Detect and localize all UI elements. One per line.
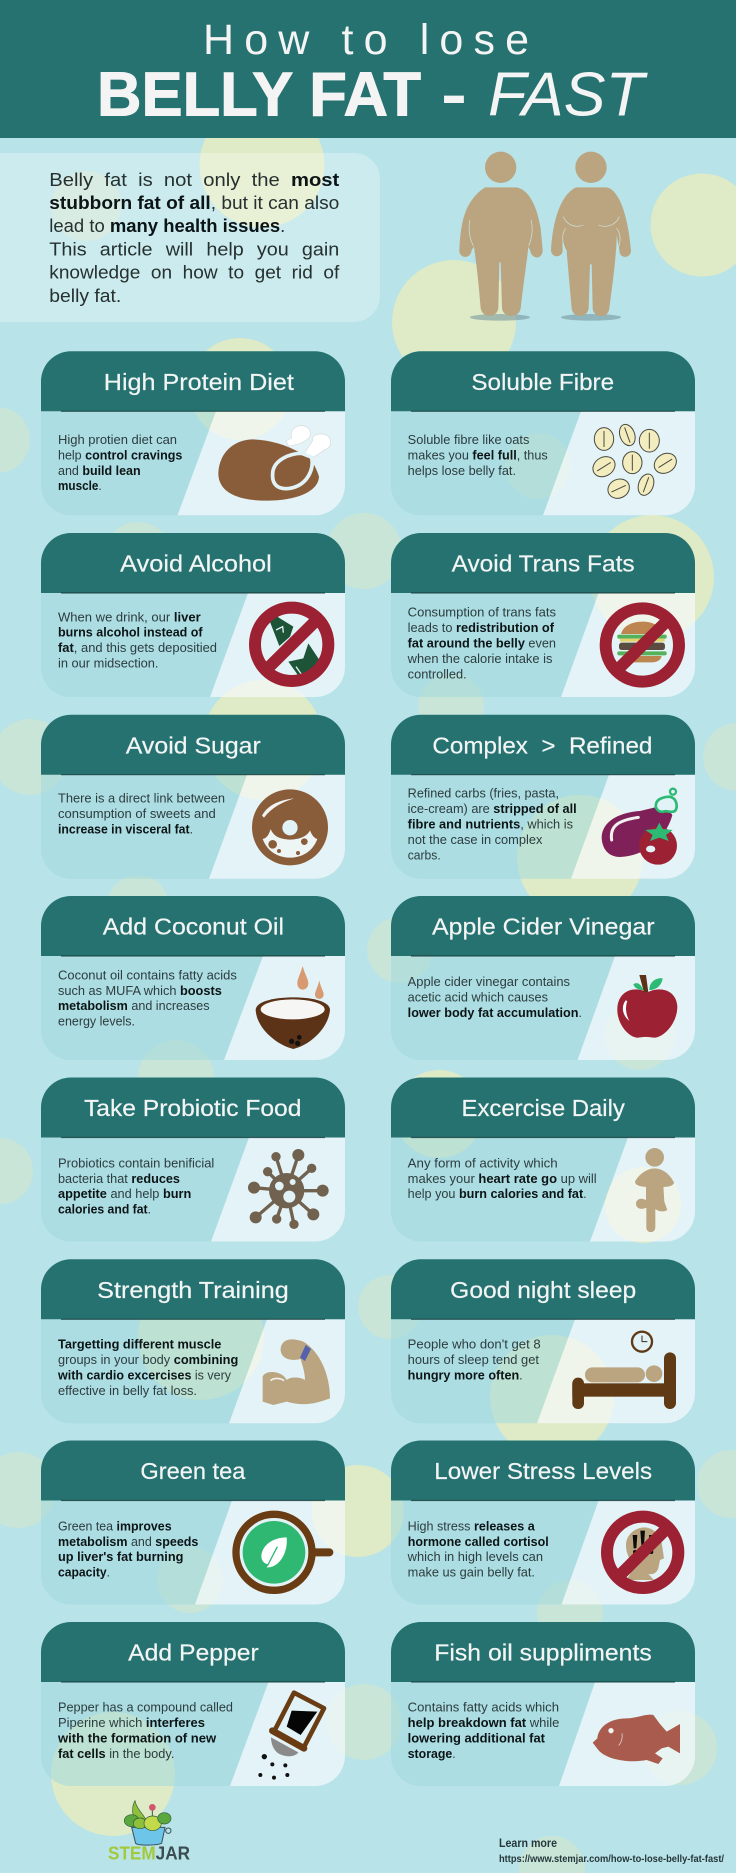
body text	[408, 787, 577, 862]
body text: Any form of activity which	[408, 1156, 558, 1170]
body text: People who don't get 8	[408, 1338, 541, 1352]
icon: fish	[593, 1715, 680, 1764]
card: Take Probiotic Food	[41, 1078, 345, 1242]
icon: apple	[617, 975, 677, 1038]
body text: Green tea improves	[58, 1519, 172, 1533]
logo wordmark: STEMJAR	[108, 1844, 190, 1864]
icon: cup of green tea	[236, 1514, 329, 1590]
body text: hormone called cortisol	[408, 1535, 549, 1549]
heading: Lower Stress Levels	[434, 1458, 652, 1484]
body text: Coconut oil contains fatty acids	[58, 968, 237, 982]
card: Apple Cider Vinegar	[391, 896, 695, 1060]
title: BELLY FAT: BELLY FAT	[97, 60, 421, 130]
card: Add Coconut Oil	[41, 896, 345, 1060]
body text: effective in belly fat loss.	[58, 1384, 197, 1398]
body text: storage.	[408, 1747, 456, 1761]
body text	[407, 1519, 549, 1580]
body text: Contains fatty acids which	[408, 1701, 559, 1715]
body text: lowering additional fat	[408, 1732, 546, 1746]
body text: lower body fat accumulation.	[408, 1006, 582, 1020]
card: Avoid Sugar	[41, 715, 345, 879]
body text	[408, 1701, 559, 1761]
heading: Fish oil suppliments	[434, 1640, 652, 1666]
body text: Refined carbs (fries, pasta,	[408, 787, 559, 801]
icon: pepper shaker	[258, 1693, 324, 1780]
body text: hours of sleep tend get	[408, 1353, 540, 1367]
body text: which in high levels can	[407, 1550, 543, 1564]
heading: Strength Training	[97, 1277, 289, 1303]
body text: ice-cream) are stripped of all	[408, 802, 577, 816]
body text: not the case in complex	[408, 833, 543, 847]
body text: when the calorie intake is	[407, 652, 552, 666]
body text: helps lose belly fat.	[408, 464, 516, 478]
body text: fat around the belly even	[408, 636, 556, 650]
body text	[58, 1156, 214, 1217]
body text	[58, 433, 182, 493]
body text: bacteria that reduces	[58, 1172, 180, 1186]
intro text	[49, 170, 340, 306]
body text: Probiotics contain benificial	[58, 1156, 214, 1170]
body text	[58, 792, 225, 836]
card: Fish oil suppliments	[391, 1622, 695, 1786]
intro text: Belly fat is not only the most	[49, 170, 339, 190]
body text: acetic acid which causes	[408, 990, 548, 1004]
body text: Targetting different muscle	[58, 1338, 221, 1352]
body text: such as MUFA which boosts	[58, 984, 222, 998]
body text: in our midsection.	[58, 656, 158, 670]
body text: increase in visceral fat.	[58, 822, 193, 836]
body text	[58, 968, 237, 1029]
body text	[408, 1338, 541, 1382]
heading: Good night sleep	[450, 1277, 636, 1303]
body text	[57, 1338, 238, 1398]
card: Add Pepper	[41, 1622, 345, 1786]
icon: flexed arm	[263, 1339, 330, 1405]
body text: makes your heart rate go up will	[408, 1172, 597, 1186]
body text: with the formation of new	[57, 1732, 216, 1746]
body text	[58, 1519, 198, 1580]
body text: leads to redistribution of	[408, 621, 555, 635]
icon: bacteria	[248, 1149, 329, 1229]
card: Complex > Refined	[391, 715, 695, 879]
heading: Add Coconut Oil	[103, 914, 284, 940]
body text: help control cravings	[58, 448, 182, 462]
card: High Protein Diet	[41, 351, 345, 515]
body text	[408, 433, 548, 478]
card: Lower Stress Levels	[391, 1440, 695, 1604]
intro text: stubborn fat of all , but it can also	[49, 193, 339, 213]
body text: When we drink, our liver	[58, 610, 201, 624]
heading: Complex > Refined	[432, 732, 652, 758]
heading: Excercise Daily	[462, 1095, 625, 1121]
body text: Apple cider vinegar contains	[408, 975, 570, 989]
body text: appetite and help burn	[58, 1187, 191, 1201]
body text: make us gain belly fat.	[408, 1566, 535, 1580]
intro text: This article will help you gain	[49, 239, 339, 259]
icon: two overweight people	[459, 152, 631, 321]
heading: Avoid Alcohol	[120, 551, 272, 577]
icon: coconut with oil drops	[256, 966, 330, 1049]
card: Avoid Trans Fats	[391, 533, 695, 697]
body text: up liver's fat burning	[58, 1550, 183, 1564]
body text	[58, 610, 217, 670]
icon: eggplant and tomato	[602, 789, 677, 865]
body text: muscle.	[58, 479, 102, 493]
body text: Piperine which interferes	[58, 1716, 205, 1730]
logo: StemJar	[108, 1801, 190, 1864]
card: Excercise Daily	[391, 1078, 695, 1242]
body text: and build lean	[58, 464, 141, 478]
icon: no burger sign	[606, 608, 679, 682]
body text: burns alcohol instead of	[58, 626, 203, 640]
heading: Add Pepper	[128, 1640, 259, 1666]
body text: Consumption of trans fats	[408, 606, 556, 620]
body text: help you burn calories and fat.	[408, 1187, 587, 1201]
body text	[407, 606, 556, 681]
card: Green tea	[41, 1440, 345, 1604]
card: Good night sleep	[391, 1259, 695, 1423]
heading: Avoid Sugar	[126, 732, 261, 758]
card: Soluble Fibre	[391, 351, 695, 515]
intro text: belly fat.	[49, 286, 121, 306]
body text: capacity.	[58, 1566, 110, 1580]
icon: oats	[589, 422, 680, 502]
body text: High protien diet can	[58, 433, 177, 447]
logo icon: plant in pot	[124, 1801, 171, 1845]
body text: High stress releases a	[408, 1519, 536, 1533]
icon: no stress sign	[607, 1517, 678, 1588]
heading: Soluble Fibre	[471, 369, 614, 395]
icon: donut	[252, 789, 328, 865]
icon: person in bed with clock	[572, 1332, 676, 1409]
footer: learn more link	[499, 1838, 724, 1865]
body text: with cardio excercises is very	[57, 1368, 232, 1382]
body text	[408, 1156, 597, 1201]
footer: learn more link: Learn more	[499, 1838, 557, 1850]
body text	[408, 975, 582, 1020]
intro text: lead to many health issues.	[49, 216, 285, 236]
title banner	[0, 0, 736, 138]
body text	[57, 1701, 233, 1761]
body text: makes you feel full, thus	[408, 448, 548, 462]
body text: Pepper has a compound called	[58, 1701, 233, 1715]
body text: energy levels.	[58, 1015, 135, 1029]
body text: hungry more often.	[408, 1368, 523, 1382]
body text: fibre and nutrients, which is	[408, 818, 573, 832]
icon: roast turkey	[218, 426, 331, 501]
body text: metabolism and increases	[58, 999, 210, 1013]
intro text: knowledge on how to get rid of	[49, 263, 340, 283]
icon: yoga person	[635, 1148, 674, 1232]
body text: help breakdown fat while	[408, 1716, 559, 1730]
heading: Green tea	[140, 1458, 246, 1484]
body text: Soluble fibre like oats	[408, 433, 529, 447]
body text: There is a direct link between	[58, 792, 225, 806]
body text: groups in your body combining	[58, 1353, 238, 1367]
card: Strength Training	[41, 1259, 345, 1423]
icon: no alcohol sign	[255, 608, 328, 685]
panel: introduction	[0, 153, 380, 322]
body text: fat, and this gets depositied	[58, 641, 217, 655]
heading: Take Probiotic Food	[84, 1095, 301, 1121]
body text: controlled.	[408, 667, 467, 681]
heading: Apple Cider Vinegar	[432, 914, 655, 940]
body text: metabolism and speeds	[58, 1535, 198, 1549]
title: dash: -	[441, 60, 467, 130]
heading: Avoid Trans Fats	[452, 551, 635, 577]
card: Avoid Alcohol	[41, 533, 345, 697]
heading: High Protein Diet	[104, 369, 294, 395]
body text: carbs.	[408, 848, 441, 862]
body text: consumption of sweets and	[58, 807, 216, 821]
body text: calories and fat.	[58, 1203, 151, 1217]
title: FAST: FAST	[488, 60, 648, 130]
title: How to lose: How to lose	[203, 16, 529, 64]
body text: fat cells in the body.	[58, 1747, 174, 1761]
